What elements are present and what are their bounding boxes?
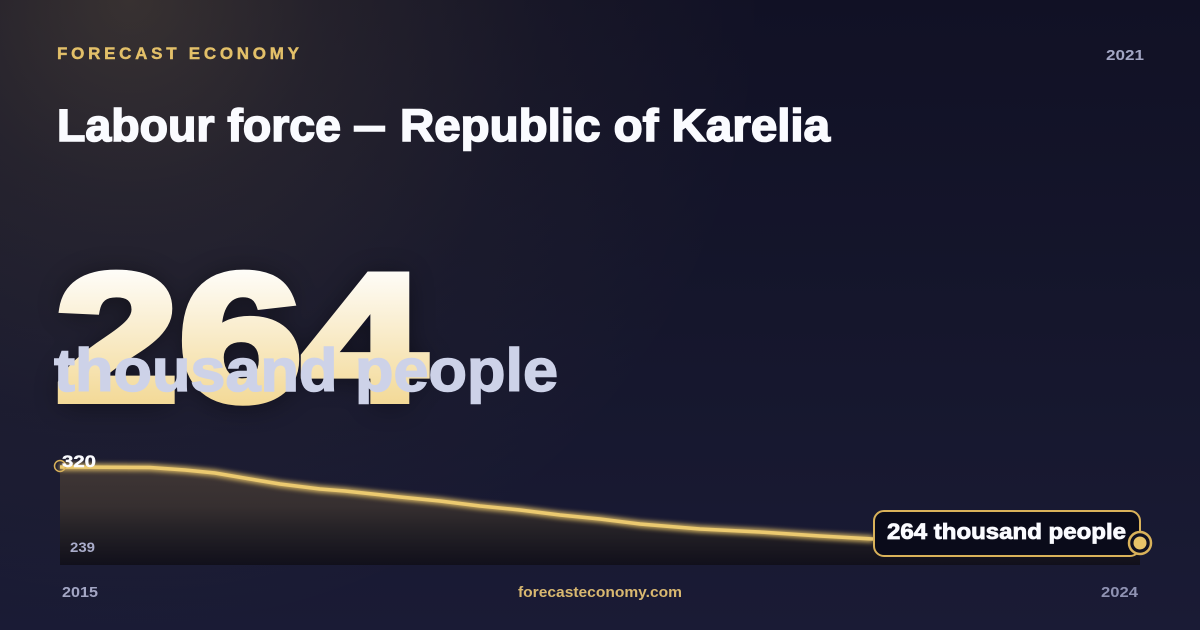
trend line — [60, 467, 873, 539]
start year: 2015 — [62, 584, 98, 601]
value callout: 264 thousand people — [887, 519, 1126, 544]
end year: 2024 — [1101, 584, 1139, 601]
big value: 264 — [55, 237, 426, 439]
source website: forecasteconomy.com — [518, 584, 682, 601]
end marker — [1129, 532, 1151, 554]
title: Labour force — [57, 100, 341, 151]
maximum label: 320 — [62, 452, 96, 471]
start marker — [54, 460, 66, 472]
unit label: thousand people — [54, 337, 558, 404]
big value: 264 — [55, 239, 426, 441]
brand eyebrow: FORECAST ECONOMY — [57, 44, 300, 63]
title: – — [353, 100, 386, 151]
title: Republic of Karelia — [400, 100, 831, 151]
area chart: 2015 to 2024 — [54, 452, 1140, 565]
value callout — [874, 511, 1140, 556]
line glow — [60, 467, 873, 539]
minimum label: 239 — [70, 539, 95, 555]
chart area fill — [60, 467, 1140, 565]
title — [57, 100, 831, 151]
year label: 2021 — [1106, 47, 1144, 64]
